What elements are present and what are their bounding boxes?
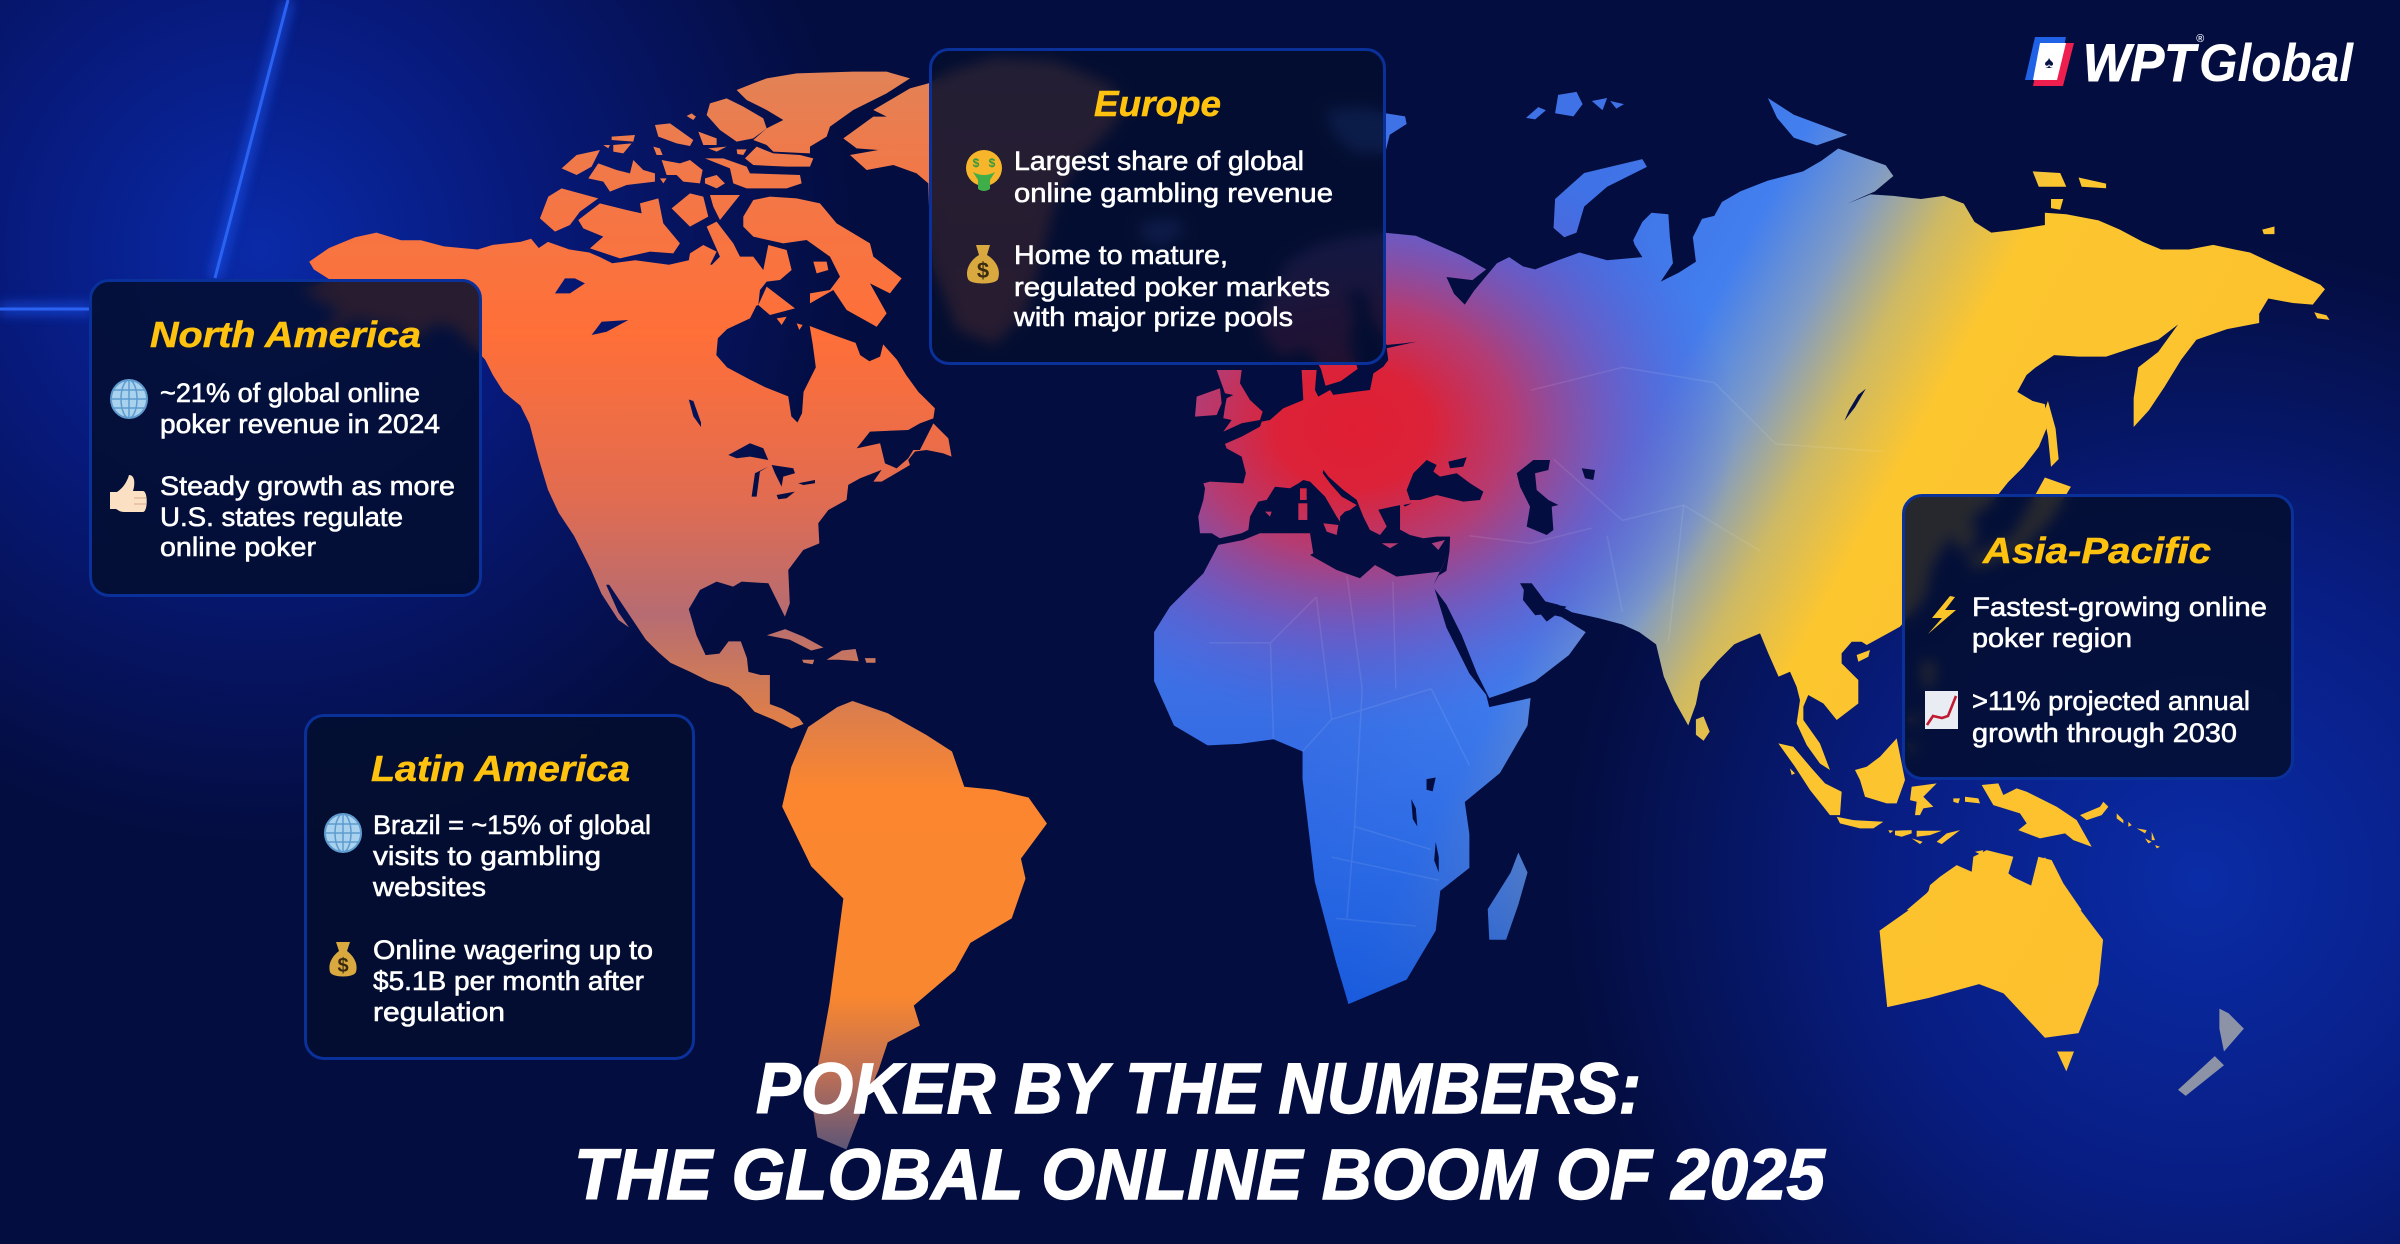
text: fastest growing: Fastest-growing online (1972, 592, 2267, 622)
panel: Europe (929, 48, 1386, 365)
text: revenue stat: poker revenue in 2024 (160, 409, 440, 439)
logo wordmark: WPT (2083, 34, 2199, 93)
text: Brazil stat: visits to gambling (373, 841, 601, 871)
text: projected growth: growth through 2030 (1972, 718, 2237, 748)
icon: money face (966, 150, 1002, 191)
world map (304, 54, 2330, 1150)
text: revenue stat (160, 378, 440, 439)
logo wordmark (2083, 33, 2354, 93)
text: mature markets (1013, 240, 1330, 332)
heading: Europe: Europe (1094, 83, 1221, 124)
text: Brazil stat: websites (372, 872, 486, 902)
panel: Latin America (304, 714, 695, 1060)
text: growth note: online poker (160, 532, 316, 562)
text: projected growth: >11% projected annual (1972, 686, 2250, 716)
text: wagering stat (373, 935, 653, 1027)
text: revenue share: Largest share of global (1014, 146, 1304, 176)
panel: Asia-Pacific (1902, 494, 2294, 780)
text: wagering stat: Online wagering up to (373, 935, 653, 965)
icon: globe (111, 380, 147, 418)
icon: money face: $ (973, 156, 980, 170)
title: POKER BY THE NUMBERS: (756, 1050, 1641, 1129)
text: wagering stat: $5.1B per month after (373, 966, 644, 996)
text: fastest growing: poker region (1972, 623, 2132, 653)
text: mature markets: regulated poker markets (1014, 272, 1330, 302)
logo: WPT Global (2025, 33, 2354, 93)
heading: North America: North America (150, 314, 421, 355)
icon: logo card: ♠ (2044, 53, 2054, 72)
icon: globe (325, 814, 361, 852)
glowing grid lines (0, 0, 288, 309)
icon: thumbs up (110, 475, 147, 512)
text: revenue stat: ~21% of global online (160, 378, 420, 408)
text: fastest growing (1972, 592, 2267, 653)
text: wagering stat: regulation (373, 997, 505, 1027)
logo wordmark: ® (2196, 33, 2205, 45)
text: mature markets: Home to mature, (1014, 240, 1228, 270)
text: growth note (160, 471, 455, 562)
panel: North America (89, 279, 482, 597)
text: revenue share: online gambling revenue (1014, 178, 1333, 208)
text: Brazil stat: Brazil = ~15% of global (373, 810, 651, 840)
heading: Asia-Pacific: Asia-Pacific (1982, 530, 2211, 571)
text: projected growth (1972, 686, 2250, 748)
text: growth note: Steady growth as more (160, 471, 455, 501)
icon: money bag: $ (977, 258, 989, 283)
heading: Latin America: Latin America (371, 748, 630, 789)
icon: money bag (329, 942, 357, 977)
icon: money bag: $ (337, 955, 349, 977)
icon: lightning bolt (1928, 596, 1956, 634)
icon: money face: $ (989, 156, 996, 170)
text: growth note: U.S. states regulate (160, 502, 403, 532)
text: mature markets: with major prize pools (1013, 302, 1293, 332)
logo wordmark: Global (2199, 34, 2354, 93)
icon: money bag (967, 245, 999, 284)
title: THE GLOBAL ONLINE BOOM OF 2025 (574, 1136, 1826, 1215)
icon: growth chart (1925, 691, 1958, 729)
text: revenue share (1014, 146, 1333, 208)
icon: logo card (2025, 37, 2074, 86)
title (574, 1050, 1826, 1215)
text: Brazil stat (372, 810, 651, 902)
